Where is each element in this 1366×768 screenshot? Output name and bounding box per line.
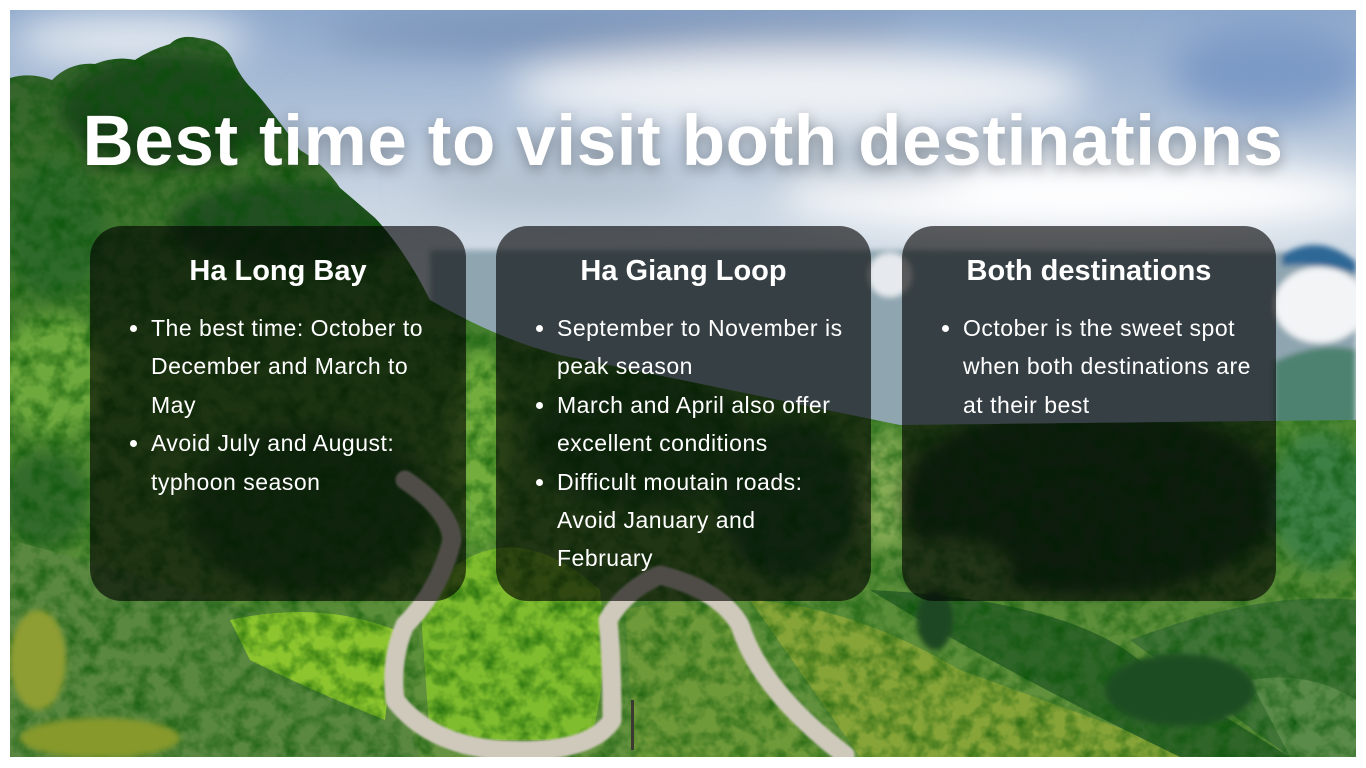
- list: Ha Giang Loop advice: February: [557, 545, 653, 571]
- list: Both destinations advice: October is the sweet spot: [963, 315, 1235, 341]
- list: Ha Giang Loop advice: Difficult moutain roads:: [557, 469, 803, 495]
- heading: Ha Long Bay: Ha Long Bay: [189, 255, 367, 287]
- panel: Both destinations: [902, 226, 1276, 601]
- list: Ha Giang Loop advice: peak season: [557, 353, 693, 379]
- list: Ha Long Bay advice: typhoon season: [151, 469, 320, 495]
- list: Ha Long Bay advice: [130, 315, 423, 495]
- panel: Ha Giang Loop: [496, 226, 871, 601]
- distant mountains and mist: [428, 240, 1356, 425]
- bright grass foreground: [10, 540, 420, 757]
- right-hand slope: [750, 600, 1200, 757]
- heading: Ha Giang Loop: Ha Giang Loop: [580, 255, 787, 287]
- foreground shrubs: [10, 590, 1255, 758]
- list: Ha Giang Loop advice: March and April also offer: [557, 392, 830, 418]
- list: Ha Giang Loop advice: [536, 315, 843, 571]
- list: Both destinations advice: [942, 315, 1251, 418]
- list: Both destinations advice: when both destinations are: [963, 353, 1251, 379]
- winding road: [394, 480, 845, 755]
- list: Ha Long Bay advice: Avoid July and August:: [151, 430, 394, 456]
- sky: [10, 10, 1356, 440]
- list: Ha Giang Loop advice: excellent conditions: [557, 430, 768, 456]
- list: Ha Long Bay advice: May: [151, 392, 196, 418]
- list: Ha Giang Loop advice: Avoid January and: [557, 507, 756, 533]
- list: Ha Long Bay advice: The best time: October to: [151, 315, 423, 341]
- pole: [631, 700, 634, 750]
- list: Ha Giang Loop advice: September to November is: [557, 315, 843, 341]
- heading: Both destinations: Both destinations: [967, 255, 1211, 287]
- list: Both destinations advice: at their best: [963, 392, 1090, 418]
- list: Ha Long Bay advice: December and March to: [151, 353, 408, 379]
- panel: Ha Long Bay: [90, 226, 466, 601]
- title: Best time to visit both destinations: [82, 102, 1284, 181]
